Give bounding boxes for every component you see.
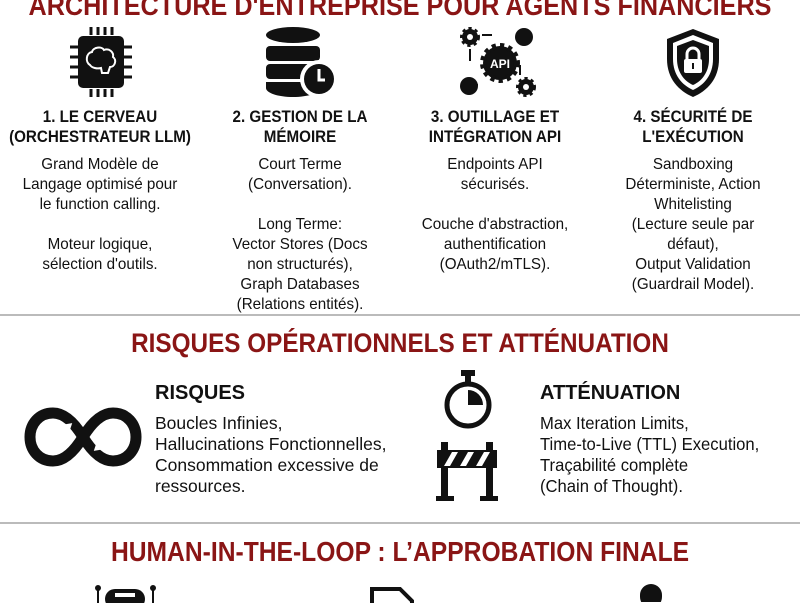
- column 1: sélection d'outils.: [42, 256, 158, 273]
- icon: database clock: [266, 27, 334, 97]
- column 3: INTÉGRATION API: [429, 128, 561, 146]
- risques text: RISQUES: [155, 382, 245, 404]
- column 4: (Lecture seule par: [632, 216, 754, 233]
- attenuation text: Time-to-Live (TTL) Execution,: [540, 434, 759, 454]
- icon: brain chip: [70, 27, 132, 97]
- column 2: Graph Databases: [240, 276, 360, 293]
- icon: stopwatch: [444, 370, 492, 428]
- column 4: [625, 107, 761, 293]
- icon: document: [370, 587, 414, 603]
- risques text: Boucles Infinies,: [155, 413, 282, 433]
- column 4: Déterministe, Action: [625, 176, 761, 193]
- column 3: sécurisés.: [461, 176, 529, 193]
- column 1: [9, 108, 191, 273]
- icon: API gears: API: [490, 57, 510, 71]
- icon: shield lock: [667, 29, 719, 97]
- column 4: Output Validation: [635, 256, 751, 273]
- risques text: [155, 382, 387, 496]
- column 4: défaut),: [667, 236, 719, 253]
- column 4: 4. SÉCURITÉ DE: [634, 108, 752, 126]
- column 2: Long Terme:: [258, 216, 342, 233]
- attenuation text: (Chain of Thought).: [540, 476, 683, 496]
- column 4: Sandboxing: [653, 156, 733, 173]
- column 1: Grand Modèle de: [41, 156, 159, 173]
- column 2: Court Terme: [258, 156, 342, 173]
- column 4: Whitelisting: [654, 196, 732, 213]
- column 1: (ORCHESTRATEUR LLM): [9, 128, 191, 146]
- column 3: Endpoints API: [447, 156, 543, 173]
- column 2: Vector Stores (Docs: [232, 236, 368, 253]
- column 2: 2. GESTION DE LA: [233, 108, 367, 126]
- column 2: (Conversation).: [248, 176, 352, 193]
- risques text: ressources.: [155, 476, 245, 496]
- risques text: Consommation excessive de: [155, 455, 379, 475]
- icon: robot: [95, 585, 156, 603]
- column 3: authentification: [444, 236, 546, 253]
- icon: infinity loop: [24, 408, 142, 466]
- section heading: human in the loop: HUMAN-IN-THE-LOOP : L’APPROBATION FINALE: [111, 536, 689, 567]
- column 3: 3. OUTILLAGE ET: [431, 108, 559, 126]
- attenuation text: Max Iteration Limits,: [540, 413, 689, 433]
- attenuation text: Traçabilité complète: [540, 455, 688, 475]
- attenuation text: ATTÉNUATION: [540, 382, 680, 404]
- attenuation text: [540, 381, 759, 496]
- column 3: [422, 108, 568, 273]
- icon: API gears: [460, 27, 536, 97]
- icon: barrier: [436, 442, 498, 501]
- icon: person: [640, 584, 662, 602]
- column 2: MÉMOIRE: [264, 128, 336, 146]
- column 3: Couche d'abstraction,: [422, 216, 568, 233]
- section heading: risques: RISQUES OPÉRATIONNELS ET ATTÉNUATION: [131, 328, 669, 358]
- column 1: 1. LE CERVEAU: [43, 108, 157, 126]
- column 4: L'EXÉCUTION: [642, 128, 744, 146]
- column 3: (OAuth2/mTLS).: [440, 256, 550, 273]
- column 1: le function calling.: [40, 196, 160, 213]
- risques text: Hallucinations Fonctionnelles,: [155, 434, 387, 454]
- column 1: Moteur logique,: [48, 236, 152, 253]
- column 2: (Relations entités).: [237, 296, 363, 313]
- column 2: non structurés),: [247, 256, 353, 273]
- column 1: Langage optimisé pour: [23, 176, 177, 193]
- column 2: [232, 108, 368, 313]
- column 4: (Guardrail Model).: [632, 276, 754, 293]
